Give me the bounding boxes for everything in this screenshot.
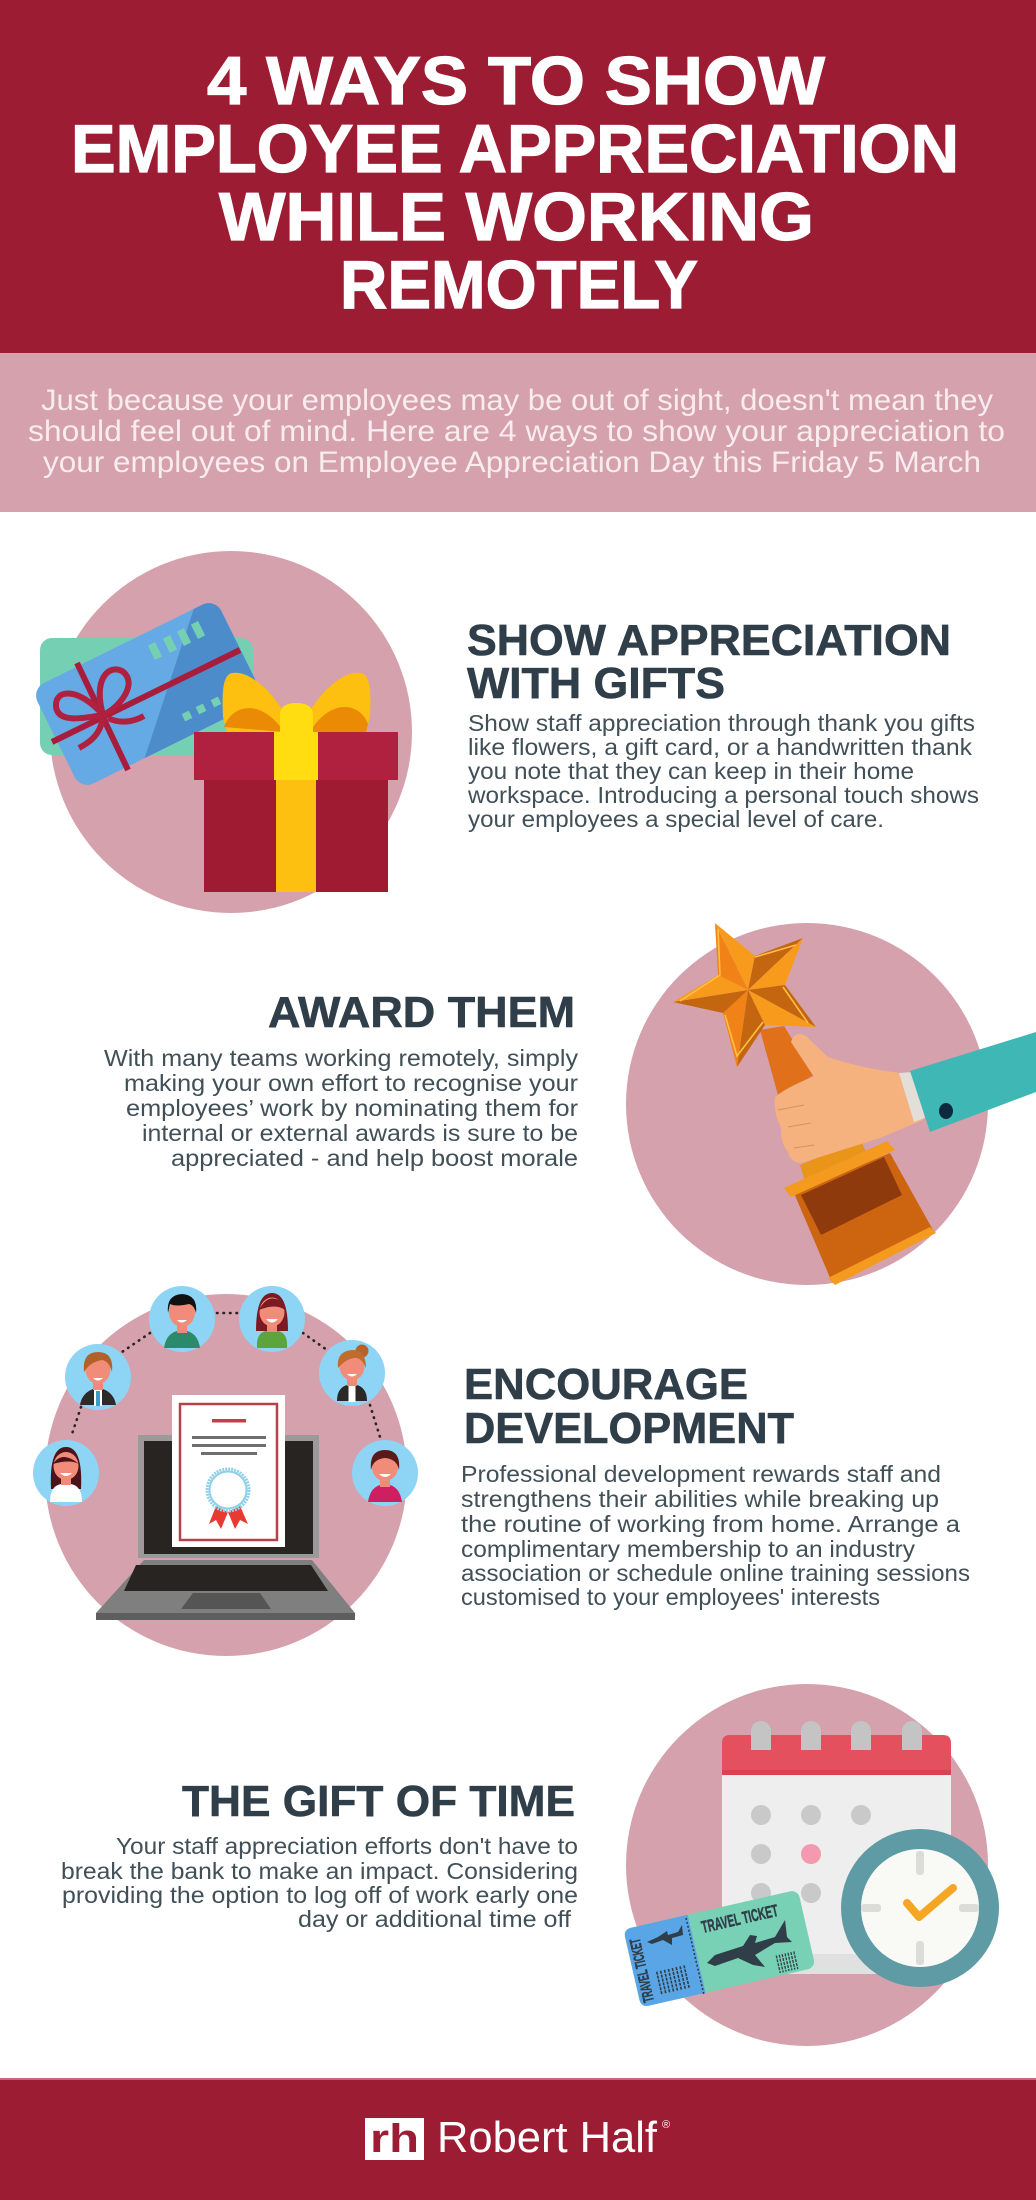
- heading: show appreciation with gifts: [467, 616, 951, 708]
- title: REMOTELY: [340, 247, 698, 323]
- icon: travel ticket: TRAVEL TICKET: [627, 1937, 658, 2004]
- avatar: woman in white: [33, 1440, 99, 1506]
- body text: award: making your own effort to recognise your: [124, 1070, 578, 1096]
- icon: green card: [40, 638, 253, 755]
- footer: [0, 2078, 1036, 2200]
- avatar: woman with bun: [319, 1340, 385, 1406]
- illustration: laptop, certificate and team: [33, 1286, 418, 1656]
- body text: gifts: [467, 710, 979, 832]
- heading: encourage development: ENCOURAGE: [464, 1360, 748, 1409]
- body text: gifts: workspace. Introducing a personal touch shows: [467, 782, 979, 808]
- title: 4 WAYS TO SHOW: [207, 43, 826, 119]
- panel: gift of time: [61, 1684, 999, 2046]
- intro text: your employees on Employee Appreciation Day this Friday 5 March: [43, 446, 981, 479]
- heading: encourage development: DEVELOPMENT: [464, 1404, 794, 1453]
- panel: award: [104, 923, 1036, 1285]
- body text: award: employees’ work by nominating them for: [126, 1095, 578, 1121]
- body text: gifts: Show staff appreciation through thank you gifts: [468, 710, 975, 736]
- text: gift of time: [61, 1777, 578, 1932]
- text: gifts: [467, 616, 979, 832]
- intro text: Just because your employees may be out of sight, doesn't mean they: [41, 384, 993, 417]
- body text: gift of time: Your staff appreciation efforts don't have to: [116, 1833, 578, 1859]
- intro text: should feel out of mind. Here are 4 ways to show your appreciation to: [28, 415, 1005, 448]
- panel: gifts: [31, 551, 979, 913]
- intro text: [28, 384, 1005, 479]
- body text: development: complimentary membership to an industry: [461, 1536, 916, 1562]
- body text: gift of time: day or additional time off: [298, 1906, 572, 1932]
- body text: development: customised to your employees' interests: [461, 1584, 880, 1610]
- icon: hand: [775, 1034, 923, 1163]
- heading: show appreciation with gifts: WITH GIFTS: [467, 659, 725, 708]
- text: award: [104, 988, 579, 1171]
- avatar: woman in green: [239, 1286, 305, 1352]
- icon: travel ticket: TRAVEL TICKET: [700, 1901, 780, 1937]
- panel: development: [33, 1286, 970, 1656]
- intro band: [0, 353, 1036, 512]
- text: development: [461, 1360, 970, 1610]
- illustration: gift card and present: [31, 551, 412, 913]
- icon: certificate: [172, 1395, 285, 1547]
- body text: gift of time: [61, 1833, 578, 1932]
- icon: gift box: [194, 673, 398, 892]
- connecting dotted lines: [71, 1313, 380, 1437]
- body text: development: Professional development rewards staff and: [461, 1461, 941, 1487]
- body text: gifts: you note that they can keep in their home: [468, 758, 914, 784]
- body text: award: appreciated - and help boost morale: [171, 1145, 578, 1171]
- logo: Robert Half: Robert Half: [437, 2113, 658, 2162]
- heading: the gift of time: THE GIFT OF TIME: [182, 1777, 575, 1826]
- body text: development: strengthens their abilities while breaking up: [461, 1486, 939, 1512]
- body text: gift of time: providing the option to log off of work early one: [62, 1882, 578, 1908]
- icon: laptop: [96, 1435, 355, 1620]
- title: [71, 43, 959, 323]
- icon: travel ticket: [623, 1890, 816, 2007]
- icon: trophy: [673, 923, 936, 1285]
- illustration: calendar, clock and ticket: [623, 1684, 999, 2046]
- icon: calendar: [722, 1721, 951, 1974]
- body text: development: the routine of working from home. Arrange a: [461, 1511, 960, 1537]
- body text: award: internal or external awards is sure to be: [142, 1120, 578, 1146]
- body text: gifts: your employees a special level of care.: [468, 806, 884, 832]
- heading: encourage development: [464, 1360, 794, 1453]
- body text: award: [104, 1045, 579, 1171]
- logo: Robert Half: ®: [662, 2119, 670, 2131]
- header banner: [0, 0, 1036, 353]
- body text: development: association or schedule online training sessions: [461, 1560, 970, 1586]
- heading: award them: AWARD THEM: [268, 988, 575, 1037]
- body text: gift of time: break the bank to make an impact. Considering: [61, 1858, 578, 1884]
- avatar: man in suit: [65, 1344, 131, 1410]
- avatar: person in magenta: [352, 1440, 418, 1506]
- illustration: trophy in hand: [626, 923, 1036, 1285]
- heading: show appreciation with gifts: SHOW APPRECIATION: [467, 616, 951, 665]
- icon: clock: [841, 1829, 999, 1987]
- logo: Robert Half: rh: [370, 2117, 419, 2161]
- icon: blue gift card: [36, 603, 256, 785]
- title: WHILE WORKING: [219, 179, 814, 255]
- body text: development: [461, 1461, 970, 1610]
- icon: sleeve: [899, 1032, 1036, 1132]
- body text: gifts: like flowers, a gift card, or a handwritten thank: [468, 734, 973, 760]
- body text: award: With many teams working remotely, simply: [104, 1045, 579, 1071]
- title: EMPLOYEE APPRECIATION: [71, 111, 959, 187]
- avatar: man in green: [149, 1286, 215, 1352]
